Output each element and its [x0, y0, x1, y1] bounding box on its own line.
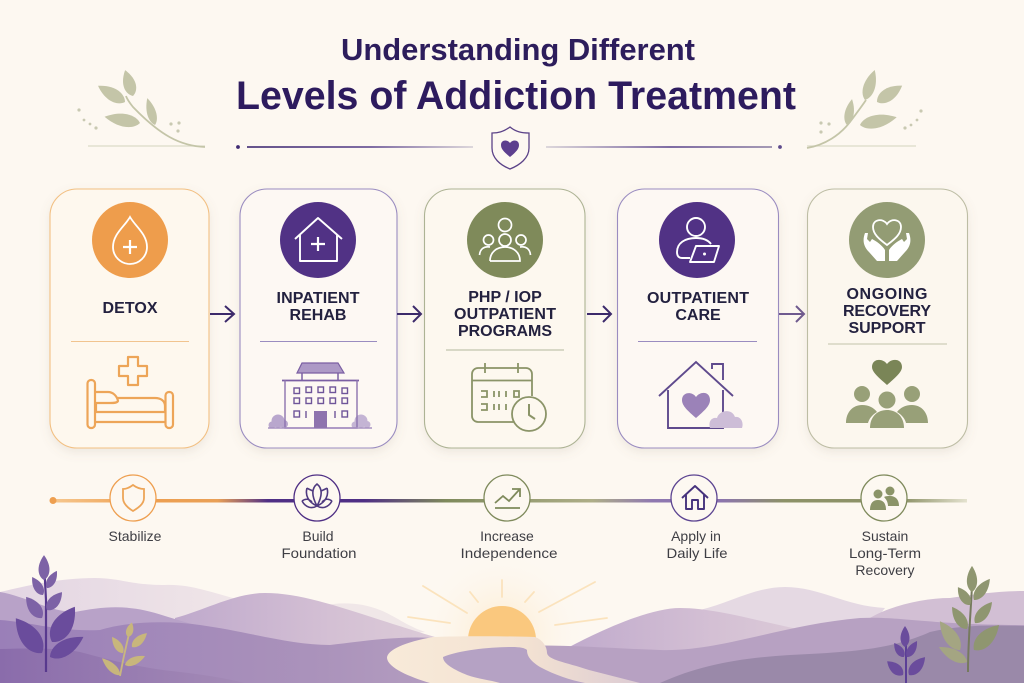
milestone: increase independence: Increase	[480, 528, 534, 544]
inner hill	[443, 647, 585, 683]
panel: outpatient care: CARE	[675, 307, 721, 324]
icon: community with heart	[846, 360, 928, 428]
decorative branch left	[77, 68, 205, 147]
title	[236, 32, 796, 118]
panel: detox	[50, 189, 209, 448]
arrow 2	[397, 306, 421, 322]
heading: php iop outpatient programs: PHP / IOP	[468, 289, 542, 306]
milestone: apply in daily life: Daily Life	[666, 545, 728, 561]
icon: house with plus	[280, 202, 356, 278]
heading: inpatient rehab: INPATIENT	[276, 290, 360, 307]
icon: bed with cross	[88, 357, 173, 428]
plant: small gold left	[99, 622, 150, 678]
icon: home with heart	[659, 362, 743, 428]
far hills	[0, 578, 240, 630]
milestone: build foundation	[282, 475, 356, 561]
middle hills	[175, 593, 435, 660]
plant: small purple right	[884, 626, 929, 683]
panel: php iop	[424, 189, 585, 448]
milestone: stabilize: Stabilize	[109, 528, 162, 544]
panel: outpatient care	[618, 189, 778, 448]
title: Levels of Addiction Treatment	[236, 74, 796, 118]
plant: olive right	[934, 566, 1004, 672]
panel: inpatient rehab	[240, 189, 397, 448]
heading: ongoing recovery support: ONGOING	[846, 286, 928, 303]
arrow 3	[587, 306, 611, 322]
sun rays	[408, 580, 607, 625]
decorative branch right	[807, 68, 923, 148]
panel: php iop: OUTPATIENT	[454, 306, 556, 323]
milestone: increase independence: Independence	[460, 545, 558, 561]
milestone: apply in daily life	[666, 475, 728, 561]
title divider	[236, 145, 782, 149]
icon: person with laptop	[659, 202, 735, 278]
milestone: sustain long-term recovery	[849, 475, 921, 578]
icon: hands holding heart	[849, 202, 925, 278]
title: Understanding Different	[341, 32, 695, 67]
arrow 4	[779, 306, 804, 322]
road	[387, 636, 640, 683]
arrow 1	[210, 306, 234, 322]
panel: inpatient rehab: REHAB	[290, 307, 346, 324]
milestone: sustain long-term recovery: Recovery	[855, 562, 915, 578]
panel: php iop: PROGRAMS	[458, 323, 552, 340]
icon: calendar with clock	[472, 363, 546, 431]
sun glow	[400, 550, 604, 660]
milestone: build foundation: Foundation	[282, 545, 356, 561]
milestone: increase independence	[460, 475, 558, 561]
milestone: build foundation: Build	[302, 528, 334, 544]
icon: group of people	[467, 202, 543, 278]
panel: ongoing recovery support: RECOVERY	[843, 303, 931, 320]
icon: hospital building	[268, 363, 372, 428]
timeline progress bar	[50, 497, 967, 504]
front hills	[0, 620, 540, 683]
milestone: stabilize	[109, 475, 162, 544]
sun	[468, 606, 536, 640]
panel: ongoing recovery support: SUPPORT	[848, 320, 926, 337]
landscape with hills, sun and road	[0, 550, 1024, 683]
icon: water drop	[92, 202, 168, 278]
plant: large purple left	[8, 555, 87, 672]
heading: detox: DETOX	[102, 300, 158, 317]
milestone: apply in daily life: Apply in	[671, 528, 721, 544]
milestone: sustain long-term recovery: Sustain	[862, 528, 908, 544]
icon: shield with heart	[492, 127, 529, 169]
panel: ongoing recovery support	[808, 189, 968, 448]
heading: outpatient care: OUTPATIENT	[647, 290, 749, 307]
milestone: sustain long-term recovery: Long-Term	[849, 545, 921, 561]
